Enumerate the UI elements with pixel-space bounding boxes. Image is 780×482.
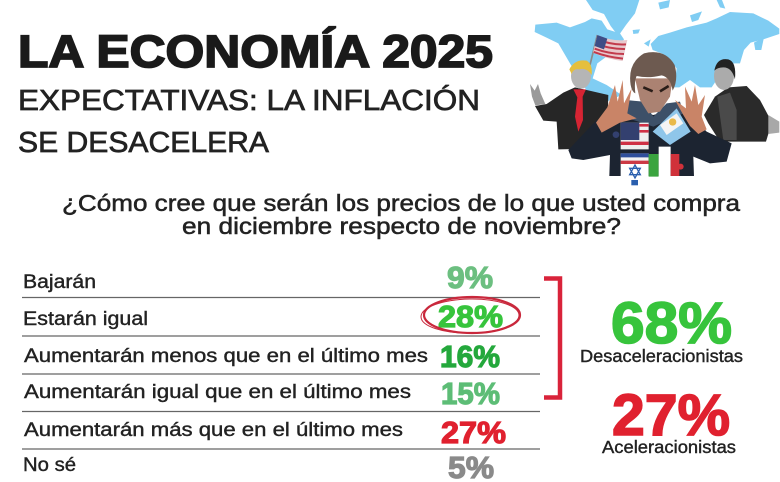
row: Aumentarán más: Aumentarán más que en el último mes — [24, 420, 403, 441]
summary: Desaceleracionistas: 68% — [611, 291, 732, 356]
row: Aumentarán igual: Aumentarán igual que en el último mes — [24, 382, 411, 403]
row: Estarán igual: 28% — [438, 299, 503, 334]
row: Bajarán: Bajarán — [23, 272, 96, 293]
row: Aumentarán más: 27% — [441, 415, 506, 450]
row: Aumentarán menos: 16% — [440, 339, 500, 374]
row: Aumentarán menos: Aumentarán menos que en el último mes — [24, 346, 428, 367]
summary: Aceleracionistas: 27% — [612, 383, 730, 448]
subtitle: EXPECTATIVAS: LA INFLACIÓN — [18, 84, 480, 117]
icon: US flag — [590, 35, 627, 65]
subtitle — [18, 84, 480, 159]
row: Estarán igual — [23, 299, 503, 334]
summary: Desaceleracionistas: Desaceleracionistas — [580, 346, 743, 366]
figure: Milei — [568, 52, 732, 176]
world map — [535, 0, 779, 102]
row: Aumentarán menos — [24, 339, 500, 374]
puzzle pieces: flags — [613, 108, 691, 185]
row: Aumentarán igual: 15% — [441, 376, 500, 411]
callout: red hand-drawn circle — [421, 297, 520, 334]
summary: Aceleracionistas: Aceleracionistas — [602, 437, 736, 457]
figure: Trump — [530, 60, 608, 149]
summary: Desaceleracionistas — [580, 291, 743, 366]
figure: Musk — [704, 59, 779, 142]
row: Aumentarán igual — [24, 376, 500, 411]
row: Estarán igual: Estarán igual — [23, 309, 148, 330]
table of responses — [22, 260, 540, 482]
row: Bajarán: 9% — [447, 260, 493, 295]
question: ¿Cómo cree que serán los precios de lo que usted compra — [62, 190, 740, 216]
question: en diciembre respecto de noviembre? — [182, 213, 621, 239]
title: LA ECONOMÍA 2025 — [18, 26, 493, 77]
row: No sé — [23, 450, 494, 482]
row: Aumentarán más — [24, 415, 506, 450]
bracket — [544, 278, 560, 398]
question — [62, 190, 740, 239]
row: No sé: No sé — [23, 455, 76, 476]
illustration: world map with political figures — [530, 0, 779, 185]
row: Bajarán — [23, 260, 493, 295]
subtitle: SE DESACELERA — [18, 127, 270, 159]
